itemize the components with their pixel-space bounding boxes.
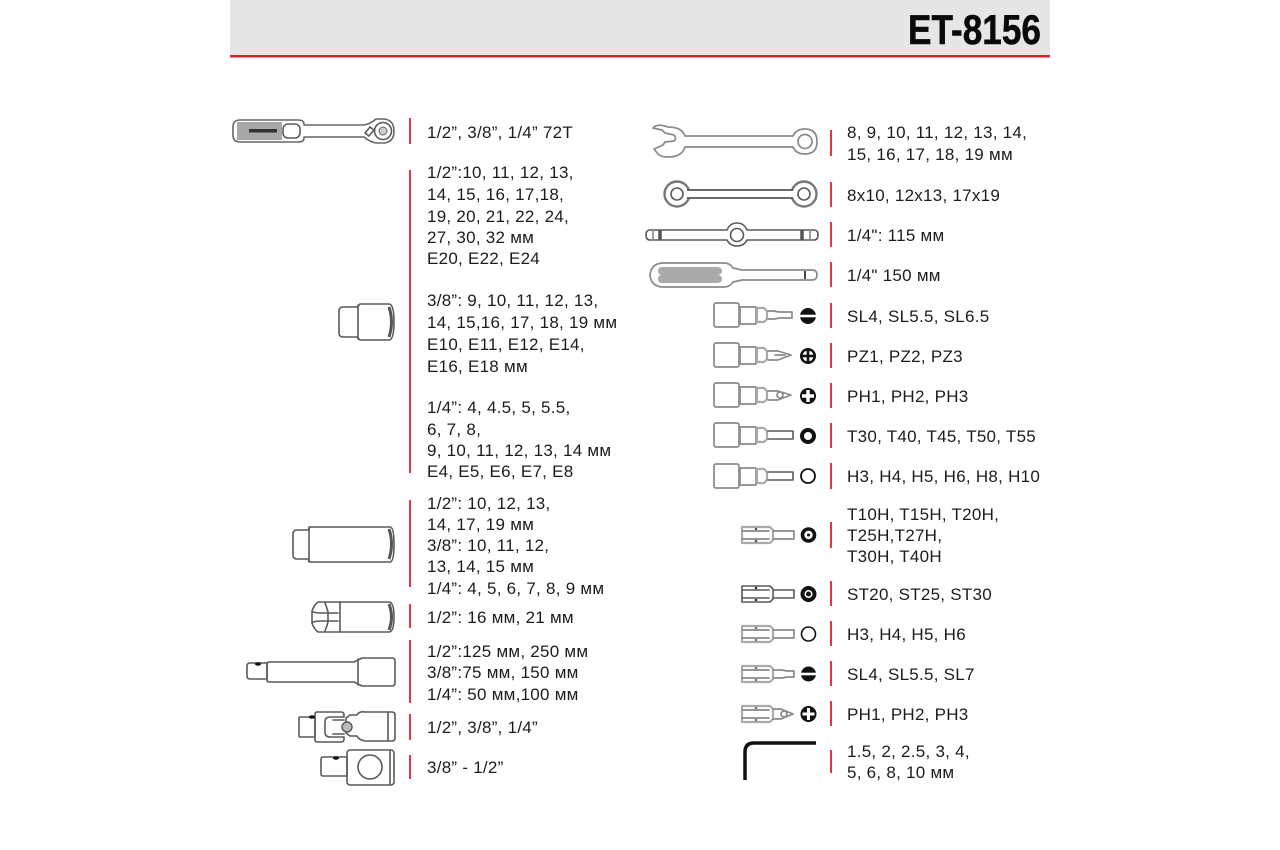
row: adapter	[321, 750, 504, 785]
icon: hex bit	[742, 626, 794, 642]
label: 1/2”, 3/8”, 1/4” 72T	[427, 123, 573, 142]
icon: torx socket bit	[714, 423, 793, 447]
row: ring wrench	[664, 182, 1000, 207]
label: SL4, SL5.5, SL7	[847, 665, 975, 684]
icon: torx-h bit	[742, 527, 794, 543]
sizes list: 1/4”: 4, 5, 6, 7, 8, 9 мм	[427, 579, 604, 598]
icon: ratchet	[233, 119, 394, 143]
row: combination wrench	[653, 123, 1027, 164]
icon: hex tip	[801, 469, 815, 483]
divider	[830, 661, 832, 686]
icon: extension bar	[247, 658, 395, 686]
sizes list: 1/4”: 4, 4.5, 5, 5.5,	[427, 398, 570, 417]
divider	[409, 604, 411, 628]
title: ET-8156	[908, 6, 1041, 53]
icon: torx-h tip	[802, 529, 814, 541]
row: SL socket bit	[714, 303, 989, 328]
icon: phillips tip	[800, 706, 816, 722]
label: H3, H4, H5, H6, H8, H10	[847, 467, 1040, 486]
label: ST20, ST25, ST30	[847, 585, 992, 604]
icon: socket	[339, 304, 394, 340]
icon: phillips tip	[800, 388, 816, 404]
sizes list: 1/2”:10, 11, 12, 13,	[427, 163, 574, 182]
sizes list: 3/8”: 9, 10, 11, 12, 13,	[427, 291, 598, 310]
sizes list: E20, E22, E24	[427, 249, 540, 268]
row: ratchet	[233, 118, 573, 144]
icon: adapter	[321, 750, 394, 785]
label	[847, 742, 970, 782]
divider	[830, 343, 832, 368]
label: 15, 16, 17, 18, 19 мм	[847, 145, 1013, 164]
sizes list: 3/8”: 10, 11, 12,	[427, 536, 549, 555]
divider	[830, 182, 832, 207]
label	[847, 123, 1027, 164]
divider	[830, 522, 832, 548]
row: universal joint	[299, 712, 538, 742]
sizes list: E4, E5, E6, E7, E8	[427, 462, 573, 481]
divider	[409, 714, 411, 740]
header band	[230, 0, 1050, 58]
label: PH1, PH2, PH3	[847, 705, 968, 724]
divider	[830, 383, 832, 408]
sizes list: 9, 10, 11, 12, 13, 14 мм	[427, 441, 611, 460]
label: 1/4" 150 мм	[847, 266, 941, 285]
icon: hex socket bit	[714, 464, 793, 488]
icon: slotted bit	[742, 666, 794, 682]
divider	[409, 118, 411, 144]
icon: pozidriv socket bit	[714, 343, 791, 367]
icon: hex tip	[802, 627, 816, 641]
icon: ST tip	[802, 588, 814, 600]
icon: ring wrench	[664, 182, 816, 206]
row: phillips bit	[742, 701, 968, 726]
label: 1.5, 2, 2.5, 3, 4,	[847, 742, 970, 761]
row: hex bit	[742, 621, 966, 646]
sizes list: 13, 14, 15 мм	[427, 557, 534, 576]
row: hex keys	[745, 742, 970, 782]
label: T30, T40, T45, T50, T55	[847, 427, 1036, 446]
sizes list: 1/2”:125 мм, 250 мм	[427, 642, 588, 661]
divider	[830, 621, 832, 646]
row: sockets	[339, 163, 617, 481]
label: T25H,T27H,	[847, 526, 942, 545]
sizes list: 14, 17, 19 мм	[427, 515, 534, 534]
sizes list	[427, 494, 604, 598]
divider	[409, 170, 411, 473]
row: slotted bit	[742, 661, 975, 686]
icon: deep socket	[293, 527, 394, 562]
sizes list: 1/4”: 50 мм,100 мм	[427, 685, 579, 704]
divider	[830, 262, 832, 287]
sizes list: 3/8”:75 мм, 150 мм	[427, 663, 579, 682]
sizes list	[427, 163, 617, 481]
icon: ST bit	[742, 586, 794, 602]
sizes list: 14, 15, 16, 17,18,	[427, 185, 564, 204]
divider	[830, 581, 832, 606]
icon: slotted tip	[799, 666, 818, 682]
sizes list: 19, 20, 21, 22, 24,	[427, 207, 569, 226]
divider	[830, 463, 832, 489]
label: 8x10, 12x13, 17x19	[847, 186, 1000, 205]
icon: spark plug socket	[312, 602, 394, 632]
row: Torx socket bit	[714, 423, 1036, 448]
label: PZ1, PZ2, PZ3	[847, 347, 963, 366]
divider	[409, 640, 411, 703]
icon: pozidriv tip	[800, 348, 816, 364]
row: deep sockets	[293, 494, 604, 598]
label: T10H, T15H, T20H,	[847, 505, 999, 524]
row: PZ socket bit	[714, 343, 963, 368]
icon: L-shaped hex key	[745, 743, 816, 780]
icon: T-handle bar	[646, 223, 818, 246]
row: Torx-H bit	[742, 505, 999, 566]
divider	[830, 303, 832, 328]
icon: torx tip	[802, 430, 814, 442]
label: 3/8” - 1/2”	[427, 758, 504, 777]
row: hex socket bit	[714, 463, 1040, 489]
divider	[830, 423, 832, 448]
icon: slotted socket bit	[714, 303, 792, 327]
row: T-handle bar	[646, 222, 944, 247]
row: extensions	[247, 640, 588, 704]
label: 1/4": 115 мм	[847, 226, 944, 245]
sizes list: E16, E18 мм	[427, 357, 528, 376]
sizes list: 6, 7, 8,	[427, 420, 481, 439]
label: H3, H4, H5, H6	[847, 625, 966, 644]
icon: slotted tip	[798, 308, 818, 324]
label	[847, 505, 999, 566]
label: 1/2”: 16 мм, 21 мм	[427, 608, 574, 627]
row: screwdriver handle	[650, 262, 941, 287]
divider	[830, 701, 832, 726]
icon: phillips bit	[742, 706, 793, 722]
label: T30H, T40H	[847, 547, 942, 566]
label: 5, 6, 8, 10 мм	[847, 763, 954, 782]
icon: screwdriver handle	[650, 263, 817, 287]
row: PH socket bit	[714, 383, 968, 408]
divider	[830, 130, 832, 156]
sizes list: 1/2”: 10, 12, 13,	[427, 494, 551, 513]
label: SL4, SL5.5, SL6.5	[847, 307, 989, 326]
icon: universal joint	[299, 712, 395, 742]
divider	[830, 750, 832, 773]
icon: phillips socket bit	[714, 383, 791, 407]
label: 1/2”, 3/8”, 1/4”	[427, 718, 538, 737]
sizes list	[427, 642, 588, 704]
sizes list: 14, 15,16, 17, 18, 19 мм	[427, 313, 617, 332]
divider	[409, 755, 411, 779]
divider	[830, 222, 832, 247]
sizes list: E10, E11, E12, E14,	[427, 335, 585, 354]
icon: combination wrench	[653, 125, 817, 157]
sizes list: 27, 30, 32 мм	[427, 228, 534, 247]
divider	[409, 500, 411, 587]
row: ST bit	[742, 581, 992, 606]
row: spark plug sockets	[312, 602, 574, 632]
label: PH1, PH2, PH3	[847, 387, 968, 406]
label: 8, 9, 10, 11, 12, 13, 14,	[847, 123, 1027, 142]
